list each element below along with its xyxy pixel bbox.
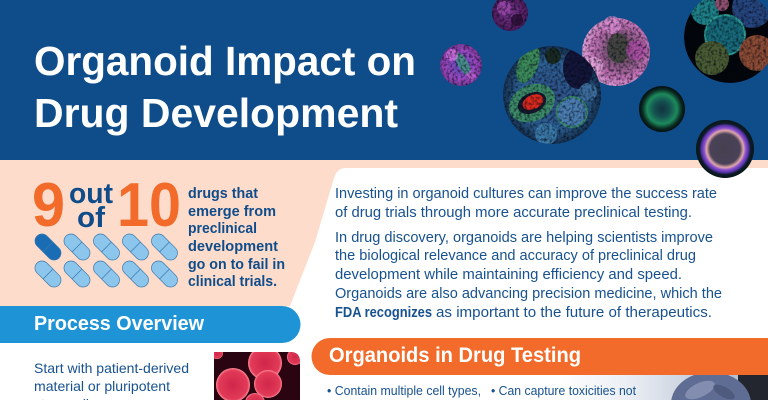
- statistic caption: clinical trials.: [188, 273, 277, 290]
- peach band: [0, 160, 768, 169]
- organoid: large blue green: [500, 42, 601, 145]
- words out of: out: [69, 178, 113, 210]
- numeral 10: 10: [117, 171, 181, 240]
- scientist photo: [587, 375, 768, 400]
- intro text: the biological relevance and accuracy of preclinical drug: [335, 247, 696, 264]
- intro text: Investing in organoid cultures can improve the success rate: [335, 185, 717, 202]
- organoid: pink: [582, 16, 650, 86]
- intro text: [335, 185, 722, 321]
- statistic caption: go on to fail in: [188, 256, 285, 273]
- process step text: [34, 360, 189, 400]
- process overview banner: [0, 306, 301, 343]
- words out of: of: [77, 202, 105, 234]
- title: Organoid Impact on: [34, 38, 416, 84]
- intro text: Organoids are also advancing precision medicine, which the: [335, 285, 722, 302]
- drug testing bullets: [327, 383, 636, 398]
- organoid: top right cluster: [684, 0, 768, 83]
- intro text: development while maintaining efficiency and speed.: [335, 266, 682, 283]
- drug testing bullets: • Contain multiple cell types,: [327, 383, 481, 398]
- process step text: Start with patient-derived: [34, 360, 189, 376]
- organoid: left purple: [440, 44, 482, 86]
- pills: remaining light: [32, 231, 180, 290]
- drug testing bullets: • Can capture toxicities not: [491, 383, 636, 398]
- title: [34, 38, 416, 136]
- white intro panel: [286, 168, 768, 340]
- words out of: [69, 178, 113, 234]
- red cell micrograph: [214, 352, 300, 400]
- process overview banner: Process Overview: [34, 313, 204, 335]
- process step text: material or pluripotent: [34, 378, 170, 394]
- organoids in drug testing banner: [312, 338, 768, 375]
- intro text: as important to the future of therapeutics.: [436, 304, 712, 321]
- pill icons: [32, 231, 180, 290]
- statistic caption: [188, 185, 285, 290]
- statistic caption: drugs that: [188, 185, 258, 202]
- organoids in drug testing banner: Organoids in Drug Testing: [329, 344, 581, 367]
- pill: failed example dark: [32, 231, 64, 263]
- statistic caption: emerge from: [188, 203, 276, 220]
- intro text: of drug trials through more accurate preclinical testing.: [335, 204, 692, 221]
- title: Drug Development: [34, 90, 398, 136]
- numeral 9: 9: [32, 171, 65, 240]
- organoid: small green: [639, 86, 685, 132]
- statistic caption: preclinical: [188, 220, 257, 237]
- organoid microscopy circles: [440, 0, 768, 178]
- intro text: FDA recognizes: [335, 304, 432, 321]
- header band: [0, 0, 768, 160]
- statistic: 9 out of 10: [32, 171, 181, 240]
- organoid: ring: [696, 120, 754, 178]
- statistic caption: development: [188, 238, 278, 255]
- intro text: In drug discovery, organoids are helping scientists improve: [335, 229, 713, 246]
- peach statistic panel: [0, 165, 345, 306]
- organoid: top purple: [492, 0, 528, 31]
